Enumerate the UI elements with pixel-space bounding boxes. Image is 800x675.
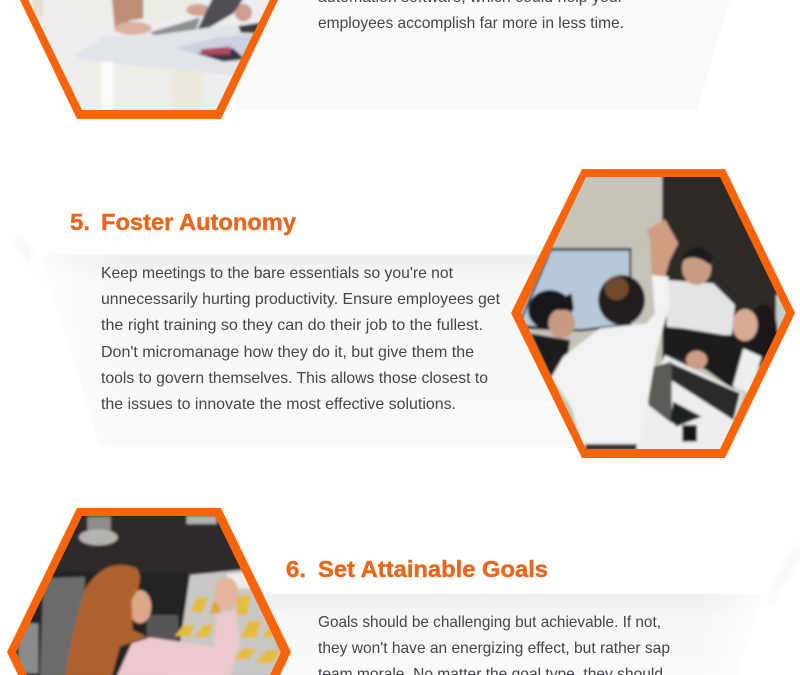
tip 5 body text: the issues to innovate the most effective solutions. (101, 396, 456, 413)
tip 6 body text (318, 614, 670, 675)
panel: tip 5 header shadow (6, 228, 50, 290)
tip 4 body text: employees accomplish far more in less time. (318, 15, 624, 32)
tip 6 hexagon photo (0, 508, 300, 675)
tip 6 body text: Goals should be challenging but achievable. If not, (318, 614, 661, 631)
tip 5 body text: the right training so they can do their job to the fullest. (101, 317, 483, 334)
panel: tip 5 background (30, 253, 570, 449)
panel: tip 6 background (220, 592, 766, 675)
tip 6 heading: 6. (286, 556, 306, 582)
tip 5 body text (101, 265, 501, 413)
tip 5 body text: unnecessarily hurting productivity. Ensure employees get (101, 291, 501, 308)
photo: woman at sticky-note board (16, 516, 281, 675)
tip 5 hexagon photo (511, 169, 795, 458)
panel: tip 4 background (235, 0, 730, 110)
tip 4 body text (318, 0, 624, 32)
tip 5 heading: 5. (70, 209, 90, 235)
tip 4 hexagon photo (20, 0, 278, 119)
hexagon frame (7, 508, 291, 675)
photo: team high five (521, 177, 786, 449)
panel: tip 6 header shadow (768, 540, 800, 606)
tip 5 heading: Foster Autonomy (101, 209, 296, 235)
hexagon frame (511, 169, 795, 458)
tip 6 body text: they won't have an energizing effect, but rather sap (318, 640, 670, 657)
tip 6 heading: Set Attainable Goals (318, 556, 548, 582)
tip 5 body text: Don't micromanage how they do it, but give them the (101, 344, 474, 361)
tip 5 body text: Keep meetings to the bare essentials so you're not (101, 265, 454, 282)
photo: woman at laptop (28, 0, 270, 110)
tip 5 body text: tools to govern themselves. This allows those closest to (101, 370, 488, 387)
hexagon frame (8, 0, 290, 119)
